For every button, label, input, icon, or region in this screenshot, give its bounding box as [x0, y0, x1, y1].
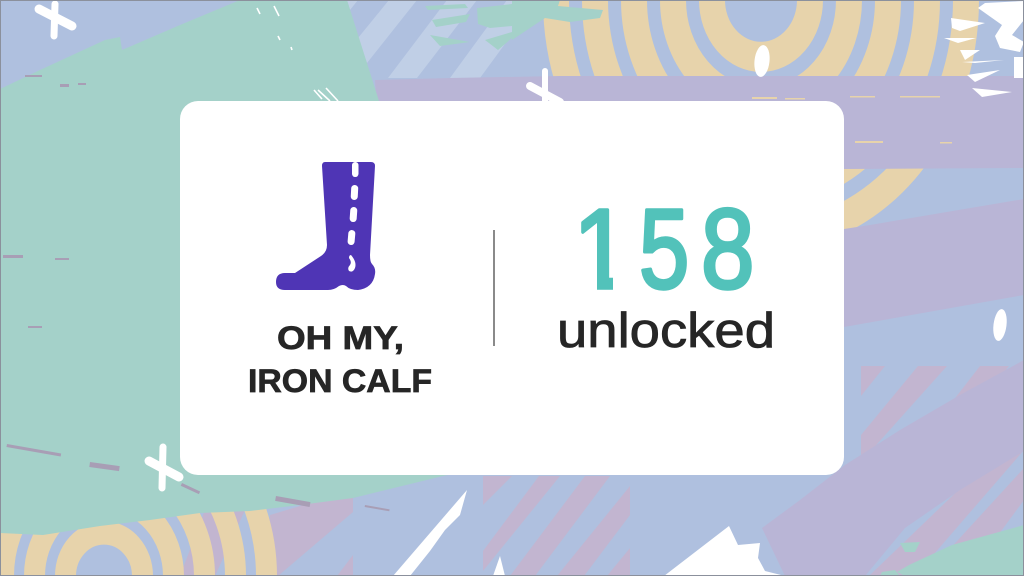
panel: white card	[180, 101, 844, 475]
background: lavender brush strokes	[375, 76, 1024, 576]
heading: badge name	[248, 320, 432, 399]
number: 158: 5	[639, 185, 689, 312]
white blob right	[992, 308, 1008, 342]
number: 158: 8	[701, 187, 754, 313]
icon: white cross bottom left	[149, 447, 179, 488]
background: light diagonal stripes	[347, 0, 537, 78]
divider	[493, 230, 495, 346]
heading: badge name: IRON CALF	[248, 363, 432, 399]
icon: white cross top left	[39, 4, 72, 36]
background: pink diagonal stripes	[180, 366, 1024, 576]
cover: serif foot of the digit 1	[570, 274, 632, 293]
number: 158	[570, 185, 754, 313]
white splash bottom centre	[393, 490, 467, 576]
icon: purple boot	[276, 162, 375, 290]
background: tan flecks on lavender	[752, 96, 952, 144]
icon: white cross top centre	[530, 71, 560, 104]
white splash top right	[944, 1, 1024, 97]
white splash bottom small	[493, 556, 505, 576]
number: 158: 1	[573, 186, 630, 312]
background: bottom left concentric arches	[0, 394, 266, 576]
heading: badge name: OH MY,	[277, 320, 404, 356]
background: top right concentric arches	[556, 0, 966, 238]
background: grey specks	[3, 75, 390, 511]
white blob top	[753, 44, 771, 78]
white splash bottom right	[664, 526, 785, 576]
white flecks above card	[257, 6, 338, 101]
background: green brush stroke	[0, 0, 480, 535]
background: green smudges	[425, 0, 1024, 576]
label: unlocked: unlocked	[557, 304, 775, 358]
